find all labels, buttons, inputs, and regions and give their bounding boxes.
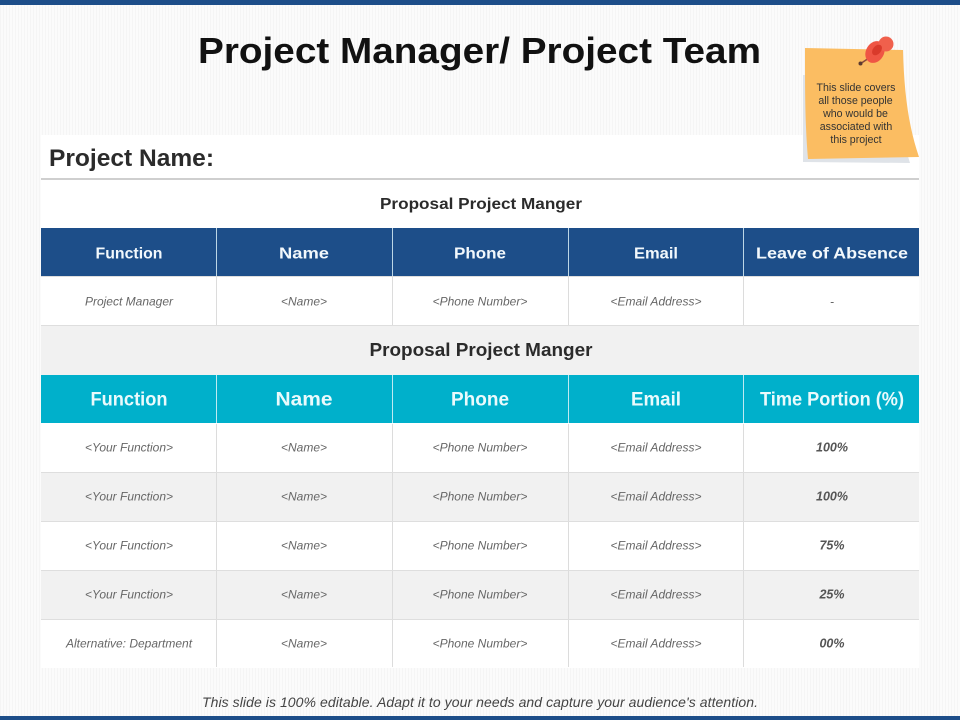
team row 2: <Email Address> <box>611 490 701 504</box>
note text: This slide covers <box>817 82 895 94</box>
note text: associated with <box>820 121 892 133</box>
title: Project Manager/ Project Team <box>198 30 761 71</box>
team row 1: <Email Address> <box>611 440 701 454</box>
team row 3: <Phone Number> <box>433 538 527 552</box>
panel: project table <box>41 135 919 668</box>
team row 3: 75% <box>819 538 845 552</box>
team row 4: <Name> <box>281 588 327 602</box>
manager table header row <box>41 228 919 276</box>
team row 3: <Your Function> <box>85 538 173 552</box>
team row 5: <Name> <box>281 636 327 650</box>
manager table data row: <Email Address> <box>611 294 701 308</box>
team row 5: <Email Address> <box>611 636 701 650</box>
manager table data row: <Phone Number> <box>433 294 527 308</box>
team row 4 <box>85 588 845 602</box>
team table header row: Name <box>276 390 332 410</box>
team row 1 <box>85 440 848 454</box>
team row 5 <box>65 636 845 650</box>
team row 1: <Your Function> <box>85 440 173 454</box>
team table header row: Time Portion (%) <box>760 390 904 410</box>
team row 5: 00% <box>819 636 845 650</box>
manager table header row: Phone <box>454 246 506 262</box>
team table header row: Email <box>631 390 681 410</box>
manager table header row: Function <box>96 246 162 262</box>
team row 3: <Name> <box>281 538 327 552</box>
team row 4: <Phone Number> <box>433 588 527 602</box>
heading band: proposal project manager <box>41 326 919 375</box>
note text: this project <box>830 134 882 146</box>
team row 1: <Phone Number> <box>433 440 527 454</box>
manager table data row: Project Manager <box>85 294 174 308</box>
manager table data row: - <box>830 294 834 308</box>
team row 3 <box>85 538 845 552</box>
manager table header row: Leave of Absence <box>756 246 908 262</box>
note text: all those people <box>818 95 893 107</box>
heading: proposal project manager: Proposal Project Manger <box>380 196 582 213</box>
manager table data row: <Name> <box>281 294 327 308</box>
heading band: proposal project manager: Proposal Project Manger <box>370 340 592 360</box>
team row 2: <Phone Number> <box>433 490 527 504</box>
manager table header row: Name <box>279 246 329 262</box>
team row 5: Alternative: Department <box>65 636 193 650</box>
manager table header row: Email <box>634 246 678 262</box>
team row 2: <Your Function> <box>85 490 173 504</box>
team table header row: Function <box>90 390 168 410</box>
manager table data row <box>85 294 834 308</box>
team row 2 <box>85 490 848 504</box>
note text: who would be <box>822 108 888 120</box>
icon: red push pin <box>858 36 894 66</box>
team table header row: Phone <box>451 390 509 410</box>
team row 4: <Email Address> <box>611 588 701 602</box>
team row 4: 25% <box>818 588 845 602</box>
team row 2: <Name> <box>281 490 327 504</box>
team row 2: 100% <box>816 490 848 504</box>
team row 1: <Name> <box>281 440 327 454</box>
team row 1: 100% <box>816 440 848 454</box>
sticky note callout <box>803 36 919 163</box>
team table header row <box>41 375 919 423</box>
team row bands <box>41 473 919 619</box>
team row 3: <Email Address> <box>611 538 701 552</box>
heading: project name: Project Name: <box>49 145 214 172</box>
team row 5: <Phone Number> <box>433 636 527 650</box>
note text <box>817 82 895 146</box>
footer note: This slide is 100% editable. Adapt it to your needs and capture your audience's attention. <box>202 694 758 710</box>
team row 4: <Your Function> <box>85 588 173 602</box>
